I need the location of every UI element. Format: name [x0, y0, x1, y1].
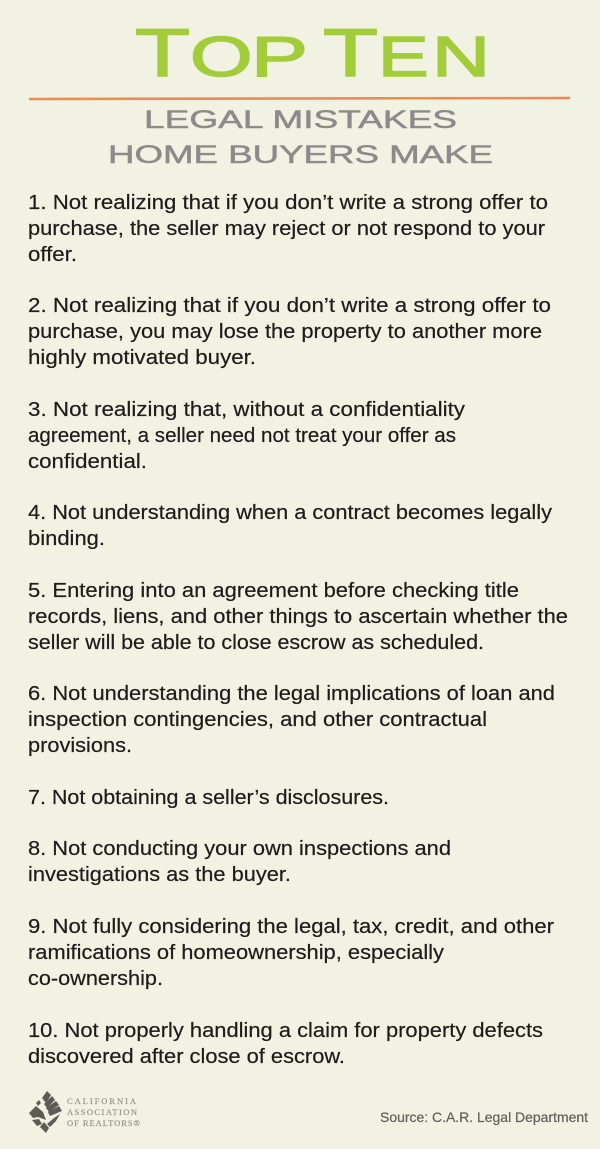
- mistake 8: investigations as the buyer.: [28, 864, 291, 886]
- logo wordmark: ASSOCIATION: [67, 1107, 137, 1117]
- mistake 4: [28, 502, 552, 550]
- mistake 6: provisions.: [28, 735, 132, 757]
- mistake 8: 8. Not conducting your own inspections and: [28, 838, 451, 860]
- mistake 6: [28, 683, 555, 757]
- title: O: [190, 25, 252, 89]
- mistake 9: 9. Not fully considering the legal, tax, credit, and other: [28, 916, 554, 938]
- mistake 1: 1. Not realizing that if you don’t write a strong offer to: [28, 192, 548, 214]
- title: T: [323, 15, 378, 91]
- title: N: [432, 25, 490, 89]
- mistake 9: ramifications of homeownership, especially: [28, 942, 444, 964]
- mistake 4: 4. Not understanding when a contract becomes legally: [28, 502, 552, 524]
- title: [135, 15, 490, 91]
- mistake 3: confidential.: [28, 451, 147, 473]
- mistake 7: 7. Not obtaining a seller’s disclosures.: [28, 787, 389, 809]
- mistake 10: 10. Not properly handling a claim for property defects: [28, 1020, 543, 1042]
- mistake 10: [28, 1020, 543, 1068]
- subtitle: [108, 106, 493, 169]
- mistake 2: purchase, you may lose the property to another more: [28, 321, 542, 343]
- mistake 2: highly motivated buyer.: [28, 347, 256, 369]
- mistake 3: [28, 399, 465, 473]
- mistake 1: offer.: [28, 244, 77, 266]
- mistake 1: purchase, the seller may reject or not respond to your: [28, 218, 545, 240]
- mistake 5: records, liens, and other things to ascertain whether the: [28, 606, 568, 628]
- mistake 3: 3. Not realizing that, without a confidentiality: [28, 399, 465, 421]
- mistake 5: seller will be able to close escrow as scheduled.: [28, 632, 484, 654]
- title: T: [135, 15, 190, 91]
- mistake 2: 2. Not realizing that if you don’t write a strong offer to: [28, 295, 551, 317]
- mistake 1: [28, 192, 548, 266]
- logo wordmark: CALIFORNIA: [67, 1096, 137, 1106]
- logo wordmark: [67, 1096, 141, 1128]
- source note: Source: C.A.R. Legal Department: [380, 1109, 588, 1125]
- subtitle: LEGAL MISTAKES: [144, 106, 457, 134]
- mistake 10: discovered after close of escrow.: [28, 1046, 345, 1068]
- title: P: [251, 25, 308, 89]
- icon: diamond emblem: [29, 1091, 62, 1133]
- mistake 9: [28, 916, 554, 990]
- mistake 6: 6. Not understanding the legal implications of loan and: [28, 683, 555, 705]
- mistake 8: [28, 838, 451, 886]
- logo: California Association of Realtors: [29, 1091, 141, 1133]
- mistake 5: [28, 580, 568, 654]
- mistake 2: [28, 295, 551, 369]
- mistake 5: 5. Entering into an agreement before checking title: [28, 580, 519, 602]
- mistake 3: agreement, a seller need not treat your offer as: [28, 425, 456, 447]
- mistake 4: binding.: [28, 528, 105, 550]
- logo wordmark: OF REALTORS®: [67, 1118, 141, 1128]
- subtitle: HOME BUYERS MAKE: [108, 141, 493, 169]
- mistake 9: co-ownership.: [28, 968, 163, 990]
- title: E: [378, 25, 429, 89]
- mistake 6: inspection contingencies, and other contractual: [28, 709, 487, 731]
